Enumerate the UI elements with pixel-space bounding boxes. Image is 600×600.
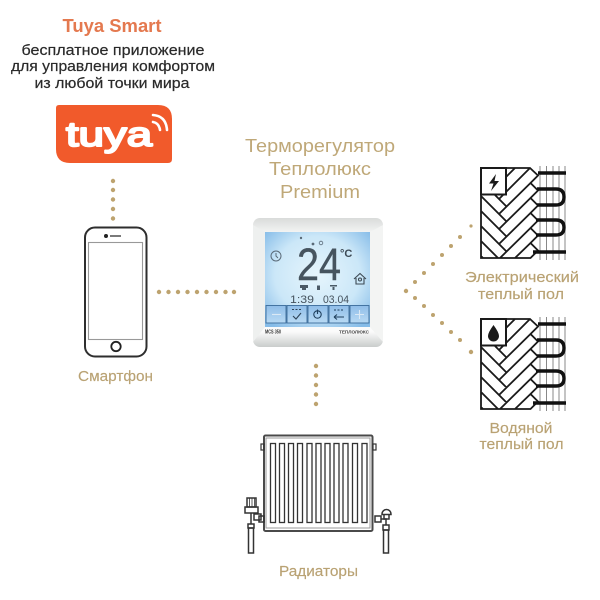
right valve <box>375 510 391 553</box>
heating cable <box>533 173 566 252</box>
heading: thermostat title: Теплолюкс <box>269 159 371 179</box>
label: radiators: Радиаторы <box>279 564 358 580</box>
radiator fins <box>270 444 367 522</box>
icon: Tuya logo <box>56 105 172 163</box>
icon: radiator <box>245 436 391 553</box>
text block: app description: бесплатное приложение <box>22 43 204 59</box>
label: electric floor: Электрический <box>465 270 579 286</box>
label: water floor: Водяной <box>490 421 552 437</box>
connector: thermostat to radiator <box>314 364 318 406</box>
time and date: 1:39 <box>290 294 314 306</box>
water box <box>481 319 506 346</box>
home icon <box>354 274 366 284</box>
heading: thermostat title <box>245 136 395 202</box>
thermostat screen <box>265 232 370 327</box>
label: electric floor: теплый пол <box>478 287 564 303</box>
buttons <box>266 306 369 323</box>
grid lines <box>540 317 565 411</box>
heating cable <box>533 324 566 403</box>
icon: water floor <box>481 317 566 411</box>
label: electric floor <box>465 270 579 303</box>
heading: Tuya Smart: Tuya Smart <box>62 16 162 36</box>
grid lines <box>540 166 565 260</box>
connector: smartphone to thermostat <box>157 290 236 294</box>
herringbone parquet <box>481 319 538 409</box>
text block: app description: для управления комфортом <box>11 59 215 75</box>
connector: thermostat to water floor <box>413 296 473 354</box>
clock icon <box>271 251 281 261</box>
mode icons <box>300 285 337 290</box>
label: water floor <box>480 421 564 453</box>
icon: thermostat: 03.04 <box>323 294 349 306</box>
icon: Tuya logo: tuya <box>66 116 152 154</box>
icon: thermostat: °C <box>340 248 352 260</box>
brand label: ТЕПЛОЛЮКС <box>339 330 370 334</box>
heading: thermostat title: Premium <box>280 182 360 202</box>
top indicators <box>300 237 323 245</box>
label: smartphone: Смартфон <box>78 368 153 385</box>
connector: Tuya to smartphone <box>111 179 115 221</box>
power box <box>481 168 506 194</box>
temperature reading: 24 <box>297 239 341 290</box>
text block: app description: из любой точки мира <box>34 76 191 92</box>
label: water floor: теплый пол <box>480 437 564 453</box>
herringbone parquet <box>481 168 538 258</box>
button glyphs <box>272 310 364 320</box>
text block: app description <box>11 43 215 92</box>
heading: thermostat title: Терморегулятор <box>245 136 395 156</box>
icon: electric floor <box>481 166 566 260</box>
model label: MCS 350 <box>265 330 281 336</box>
wall brackets <box>261 444 264 450</box>
left valve <box>245 498 264 553</box>
icon: thermostat <box>253 218 383 347</box>
radiator body <box>264 436 372 531</box>
icon: smartphone <box>85 228 146 356</box>
connector: thermostat to electric floor <box>404 224 473 293</box>
